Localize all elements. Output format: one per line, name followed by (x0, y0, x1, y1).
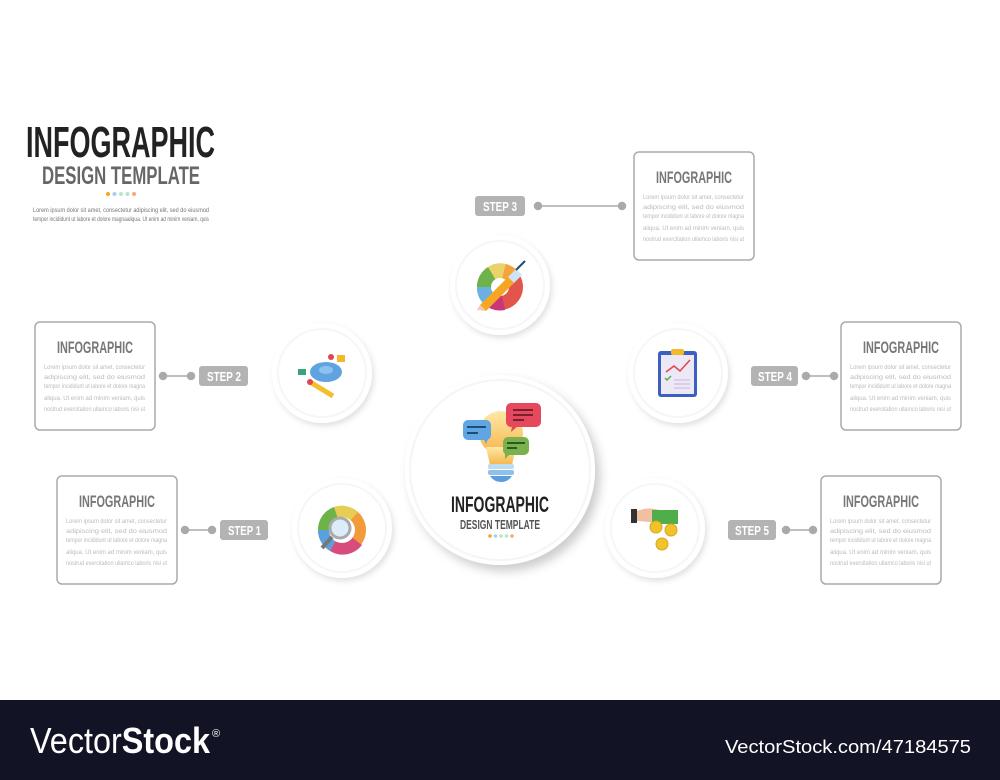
title: INFOGRAPHIC (26, 118, 215, 167)
text box: step 5: nostrud exercitation ullamco laboris nisi ut (830, 560, 931, 567)
bubble: blue (463, 420, 491, 444)
text box: step 1: Lorem ipsum dolor sit amet, consectetur (66, 518, 168, 525)
text box: step 4: tempor incididunt ut labore et dolore magna (850, 383, 951, 390)
text box: step 1: aliqua. Ut enim ad minim veniam, quis (66, 549, 168, 556)
text box: step 2: aliqua. Ut enim ad minim veniam, quis (44, 395, 146, 402)
label: step 5: STEP 5 (735, 523, 769, 538)
text box: step 4: aliqua. Ut enim ad minim veniam, quis (850, 395, 952, 402)
text box: step 5: aliqua. Ut enim ad minim veniam, quis (830, 549, 932, 556)
color dots (106, 192, 136, 196)
text box: step 1: nostrud exercitation ullamco laboris nisi ut (66, 560, 167, 567)
step circle 1 with magnifier icon (292, 478, 392, 578)
center dots (488, 534, 514, 538)
text box: step 2: adipiscing elit, sed do eiusmod (44, 374, 145, 381)
text box: step 4 (841, 322, 961, 430)
text box: step 1 (57, 476, 177, 584)
text box: step 2: Lorem ipsum dolor sit amet, consectetur (44, 364, 146, 371)
text box: step 3 (634, 152, 754, 260)
icon: clipboard chart (658, 349, 697, 397)
label: step 1: STEP 1 (228, 523, 261, 538)
icon: color wheel pencil (477, 261, 525, 311)
text box: step 3: aliqua. Ut enim ad minim veniam, quis (643, 225, 745, 232)
text box: step 4: Lorem ipsum dolor sit amet, consectetur (850, 364, 952, 371)
text box: step 3: INFOGRAPHIC (656, 168, 732, 187)
label: step 4: STEP 4 (758, 369, 793, 384)
title block (26, 118, 215, 223)
text box: step 5 (821, 476, 941, 584)
icon: magnifier over donut chart (318, 506, 366, 555)
label: step 5 (728, 520, 776, 540)
text box: step 5: INFOGRAPHIC (843, 492, 919, 511)
icon: gear with pencil (298, 354, 345, 396)
text box: step 3: Lorem ipsum dolor sit amet, consectetur (643, 194, 745, 201)
text box: step 1: INFOGRAPHIC (79, 492, 155, 511)
central circle (405, 375, 595, 565)
text box: step 2: INFOGRAPHIC (57, 338, 133, 357)
step labels (199, 196, 798, 540)
text box: step 1: tempor incididunt ut labore et dolore magna (66, 537, 167, 544)
step circle 2 with gear icon (272, 323, 372, 423)
step circle 4 with clipboard icon (628, 323, 728, 423)
text box: step 5: adipiscing elit, sed do eiusmod (830, 528, 931, 535)
text box: step 3: tempor incididunt ut labore et dolore magna (643, 213, 744, 220)
bubble: red (506, 403, 541, 432)
label: step 2 (199, 366, 248, 386)
footer url: VectorStock.com/47184575 (725, 737, 971, 757)
label: step 3: STEP 3 (483, 199, 517, 214)
text box: step 2: nostrud exercitation ullamco laboris nisi ut (44, 406, 145, 413)
footer bar: ® (212, 728, 220, 740)
step circle 3 with pencil color wheel icon (450, 235, 550, 335)
text box: step 4: adipiscing elit, sed do eiusmod (850, 374, 951, 381)
intro text (33, 208, 209, 223)
footer logo: VectorStock (30, 720, 211, 761)
icon: light bulb with speech bubbles (463, 403, 541, 482)
connectors (160, 202, 838, 534)
text box: step 1: adipiscing elit, sed do eiusmod (66, 528, 167, 535)
text box: step 4: nostrud exercitation ullamco laboris nisi ut (850, 406, 951, 413)
text box: step 4: INFOGRAPHIC (863, 338, 939, 357)
subtitle: DESIGN TEMPLATE (42, 162, 200, 190)
text box: step 3: adipiscing elit, sed do eiusmod (643, 204, 744, 211)
bubble: green (503, 437, 529, 459)
text box: step 2 (35, 322, 155, 430)
label: step 3 (475, 196, 525, 216)
label: step 1 (220, 520, 268, 540)
text box: step 3: nostrud exercitation ullamco laboris nisi ut (643, 236, 744, 243)
center subtitle: DESIGN TEMPLATE (460, 517, 540, 532)
intro text: Lorem ipsum dolor sit amet, consectetur adipiscing elit, sed do eiusmod (33, 208, 209, 214)
label: step 4 (751, 366, 798, 386)
text box: step 5: Lorem ipsum dolor sit amet, consectetur (830, 518, 932, 525)
icon: hand with coins (631, 508, 678, 550)
step circle 5 with money hand icon (605, 478, 705, 578)
footer bar (0, 700, 1000, 780)
intro text: tempor incididunt ut labore et dolore magnaaliqua. Ut enim ad minim veniam, quis (33, 217, 209, 223)
text box: step 2: tempor incididunt ut labore et dolore magna (44, 383, 145, 390)
label: step 2: STEP 2 (207, 369, 241, 384)
text box: step 5: tempor incididunt ut labore et dolore magna (830, 537, 931, 544)
center title: INFOGRAPHIC (451, 492, 549, 517)
